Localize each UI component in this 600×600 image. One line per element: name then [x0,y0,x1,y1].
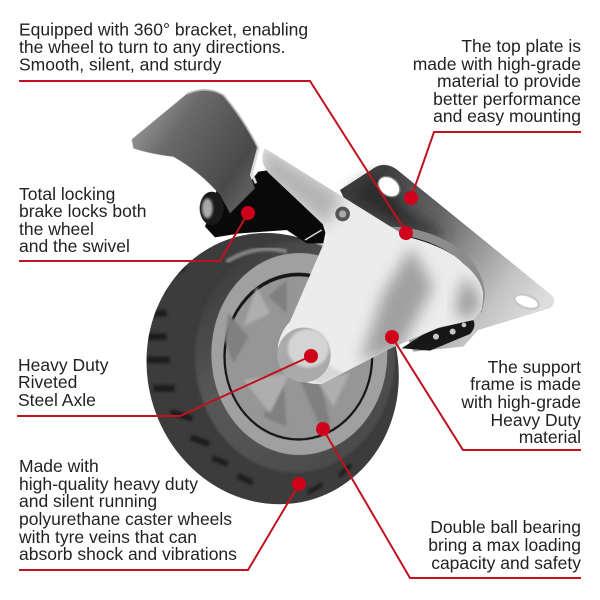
callout: locking brake: Total locking [19,184,115,204]
callout: top plate: material to provide [437,71,581,91]
callout: ball bearing: Double ball bearing [430,517,581,537]
callout: polyurethane wheels: Made with [19,456,99,476]
callout: support frame: with high-grade [460,392,581,412]
callout: riveted axle [17,349,318,416]
callout: support frame: frame is made [470,374,581,394]
dark rim edge [223,273,373,441]
brake lever [132,90,258,213]
callout: locking brake: the wheel [19,219,94,239]
brake black housing [205,170,327,243]
swivel bracket [257,143,490,390]
brake knob [200,192,224,225]
callout: top plate: The top plate is [461,36,581,56]
callout: top plate: and easy mounting [433,106,581,126]
raceway [388,227,485,313]
caster wheel product photo [132,88,554,504]
ball slot [402,320,474,351]
callout: polyurethane wheels: and silent running [19,491,157,511]
callout: polyurethane wheels: polyurethane caster wheels [19,509,232,529]
callout: support frame: material [519,427,581,447]
callout: top plate: better performance [433,89,581,109]
callout: locking brake [19,184,255,261]
callout: riveted axle: Riveted [18,372,77,392]
callout: 360 bracket: Equipped with 360° bracket, enabling [19,20,308,40]
callout: ball bearing: capacity and safety [431,553,581,573]
top mounting plate [340,165,554,352]
hub [226,276,371,438]
callout: support frame: The support [488,357,581,377]
callout: polyurethane wheels [18,456,306,570]
callout: riveted axle: Steel Axle [18,390,96,410]
tyre [112,200,434,537]
grey rim ring [211,253,387,455]
wheel [146,233,399,504]
callout: 360 bracket: Smooth, silent, and sturdy [19,54,222,74]
callout: support frame [385,330,581,450]
callout: support frame: Heavy Duty [491,410,581,430]
callout: 360 bracket [19,20,413,240]
brake assembly [132,90,327,243]
callout: 360 bracket: the wheel to turn to any directions. [19,37,286,57]
callout: ball bearing [316,422,581,578]
callout: locking brake: and the swivel [19,236,130,256]
callout: top plate: made with high-grade [413,54,581,74]
callout: polyurethane wheels: high-quality heavy duty [19,474,198,494]
rivet axle head [277,328,331,382]
callout: top plate [404,36,581,205]
callout: ball bearing: bring a max loading [428,535,581,555]
callout: locking brake: brake locks both [19,201,146,221]
rivet near bracket top [335,207,350,221]
tyre shoulder [195,241,395,473]
callout: riveted axle: Heavy Duty [18,355,109,375]
callout: polyurethane wheels: absorb shock and vibrations [19,544,237,564]
callout: polyurethane wheels: with tyre veins that can [18,527,197,547]
